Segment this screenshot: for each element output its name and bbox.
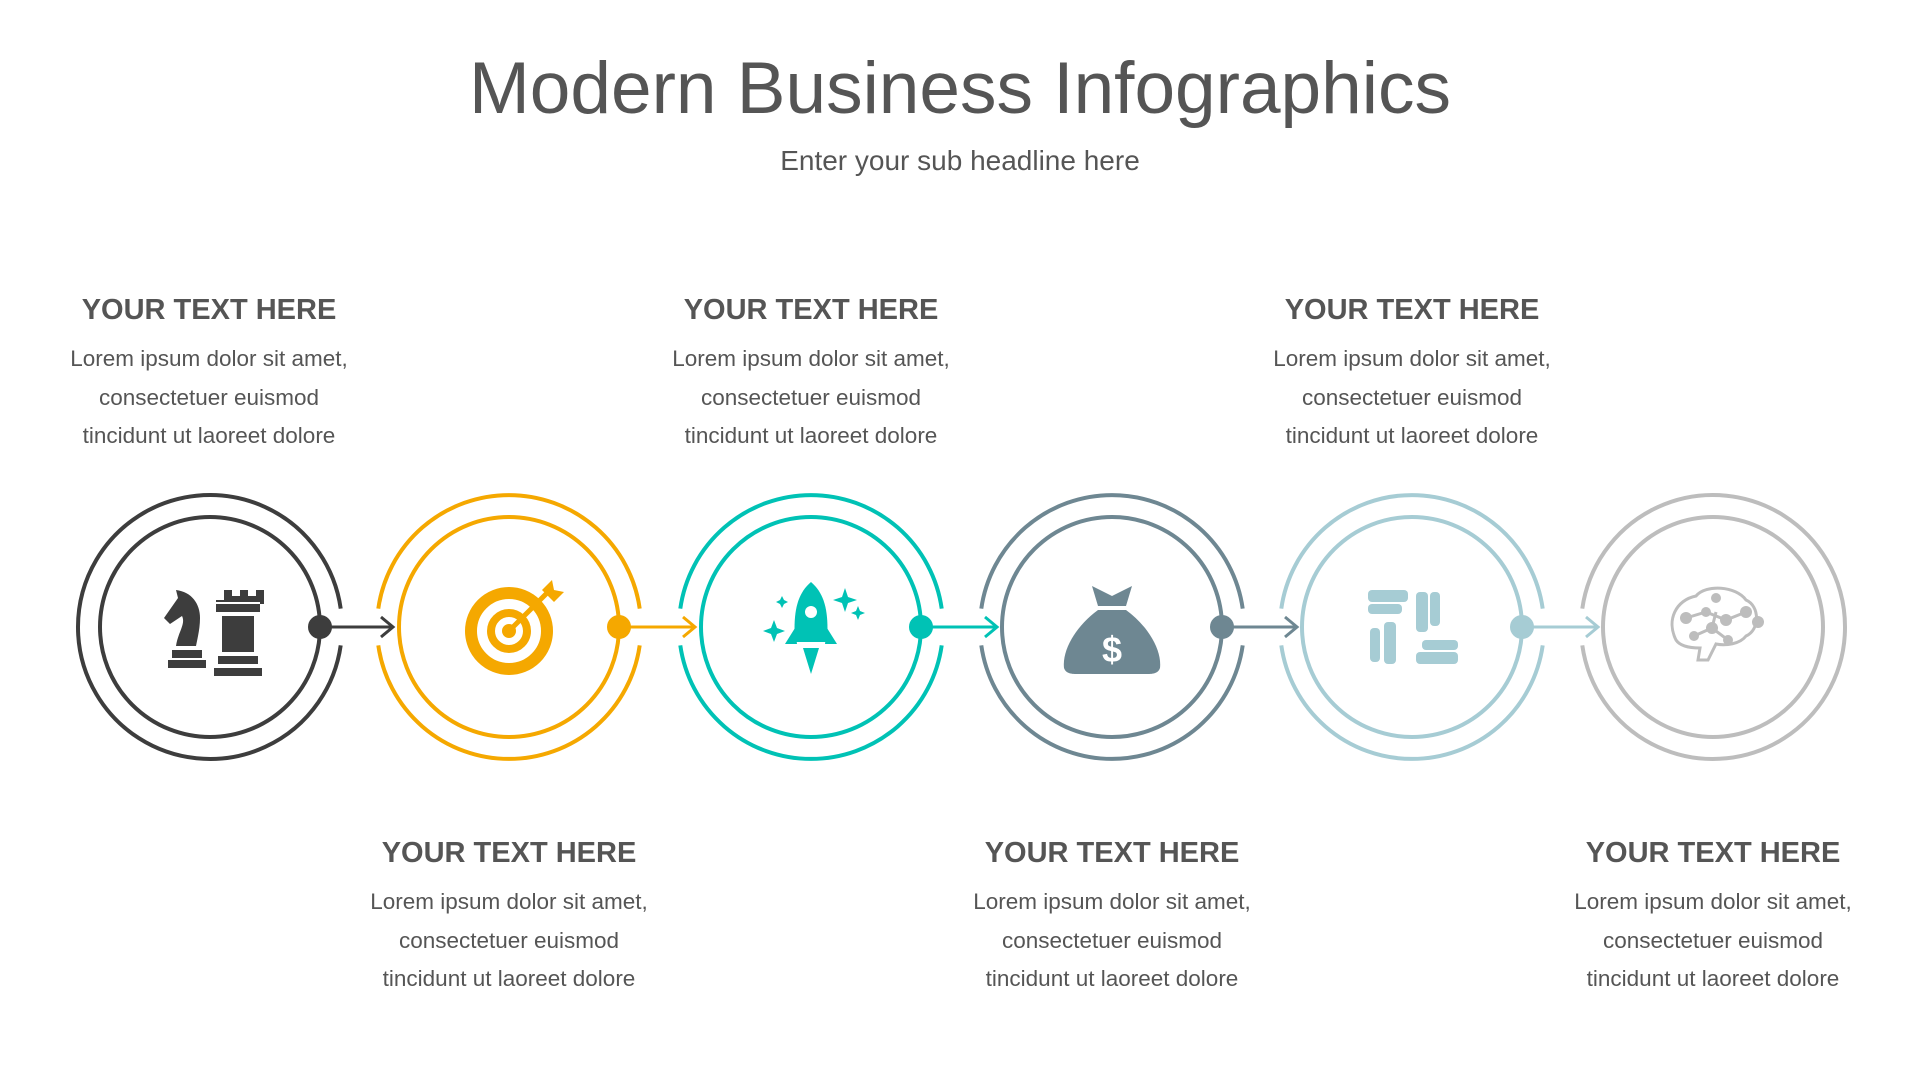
- connector 3: [911, 617, 997, 637]
- text block 5: [1273, 294, 1551, 448]
- text block 1: [70, 294, 348, 448]
- text block 5: consectetuer euismod: [1302, 384, 1522, 410]
- step 4: money bag: [981, 495, 1243, 759]
- step 2: target: [378, 495, 640, 759]
- text block 1: tincidunt ut laoreet dolore: [83, 423, 335, 448]
- text block 6: consectetuer euismod: [1603, 928, 1823, 952]
- text block 3: YOUR TEXT HERE: [684, 294, 938, 326]
- text block 3: tincidunt ut laoreet dolore: [685, 423, 937, 448]
- connector 1: [310, 617, 393, 637]
- text block 1: consectetuer euismod: [99, 384, 319, 410]
- icon: hands: [1368, 590, 1458, 664]
- connector 4: [1212, 617, 1297, 637]
- text block 6: [1574, 837, 1852, 991]
- icon: money bag: $: [1102, 629, 1122, 670]
- title: Modern Business Infographics: [469, 48, 1451, 129]
- icon: brain: [1672, 588, 1764, 660]
- text block 1: Lorem ipsum dolor sit amet,: [70, 346, 348, 371]
- step 1: chess: [78, 495, 341, 759]
- text block 2: YOUR TEXT HERE: [382, 837, 636, 869]
- connector 5: [1512, 617, 1598, 637]
- connector 2: [609, 617, 695, 637]
- text block 2: Lorem ipsum dolor sit amet,: [370, 889, 648, 914]
- text block 3: [672, 294, 950, 448]
- icon: money bag: [1064, 586, 1160, 674]
- text block 2: tincidunt ut laoreet dolore: [383, 966, 635, 991]
- text block 6: YOUR TEXT HERE: [1586, 837, 1840, 869]
- text block 6: tincidunt ut laoreet dolore: [1587, 966, 1839, 991]
- text block 5: YOUR TEXT HERE: [1285, 294, 1539, 326]
- step 3: rocket: [680, 495, 942, 759]
- step 5: hands: [1281, 495, 1543, 759]
- text block 4: YOUR TEXT HERE: [985, 837, 1239, 869]
- text block 4: tincidunt ut laoreet dolore: [986, 966, 1238, 991]
- text block 4: Lorem ipsum dolor sit amet,: [973, 889, 1251, 914]
- text block 3: consectetuer euismod: [701, 384, 921, 410]
- icon: target: [471, 580, 564, 669]
- text block 3: Lorem ipsum dolor sit amet,: [672, 346, 950, 371]
- text block 2: [370, 837, 648, 991]
- icon: chess: [164, 590, 264, 676]
- step 6: brain: [1582, 495, 1845, 759]
- text block 5: Lorem ipsum dolor sit amet,: [1273, 346, 1551, 371]
- text block 4: consectetuer euismod: [1002, 928, 1222, 952]
- subtitle: Enter your sub headline here: [780, 145, 1140, 176]
- text block 6: Lorem ipsum dolor sit amet,: [1574, 889, 1852, 914]
- icon: rocket: [763, 582, 865, 674]
- text block 5: tincidunt ut laoreet dolore: [1286, 423, 1538, 448]
- text block 1: YOUR TEXT HERE: [82, 294, 336, 326]
- text block 2: consectetuer euismod: [399, 928, 619, 952]
- text block 4: [973, 837, 1251, 991]
